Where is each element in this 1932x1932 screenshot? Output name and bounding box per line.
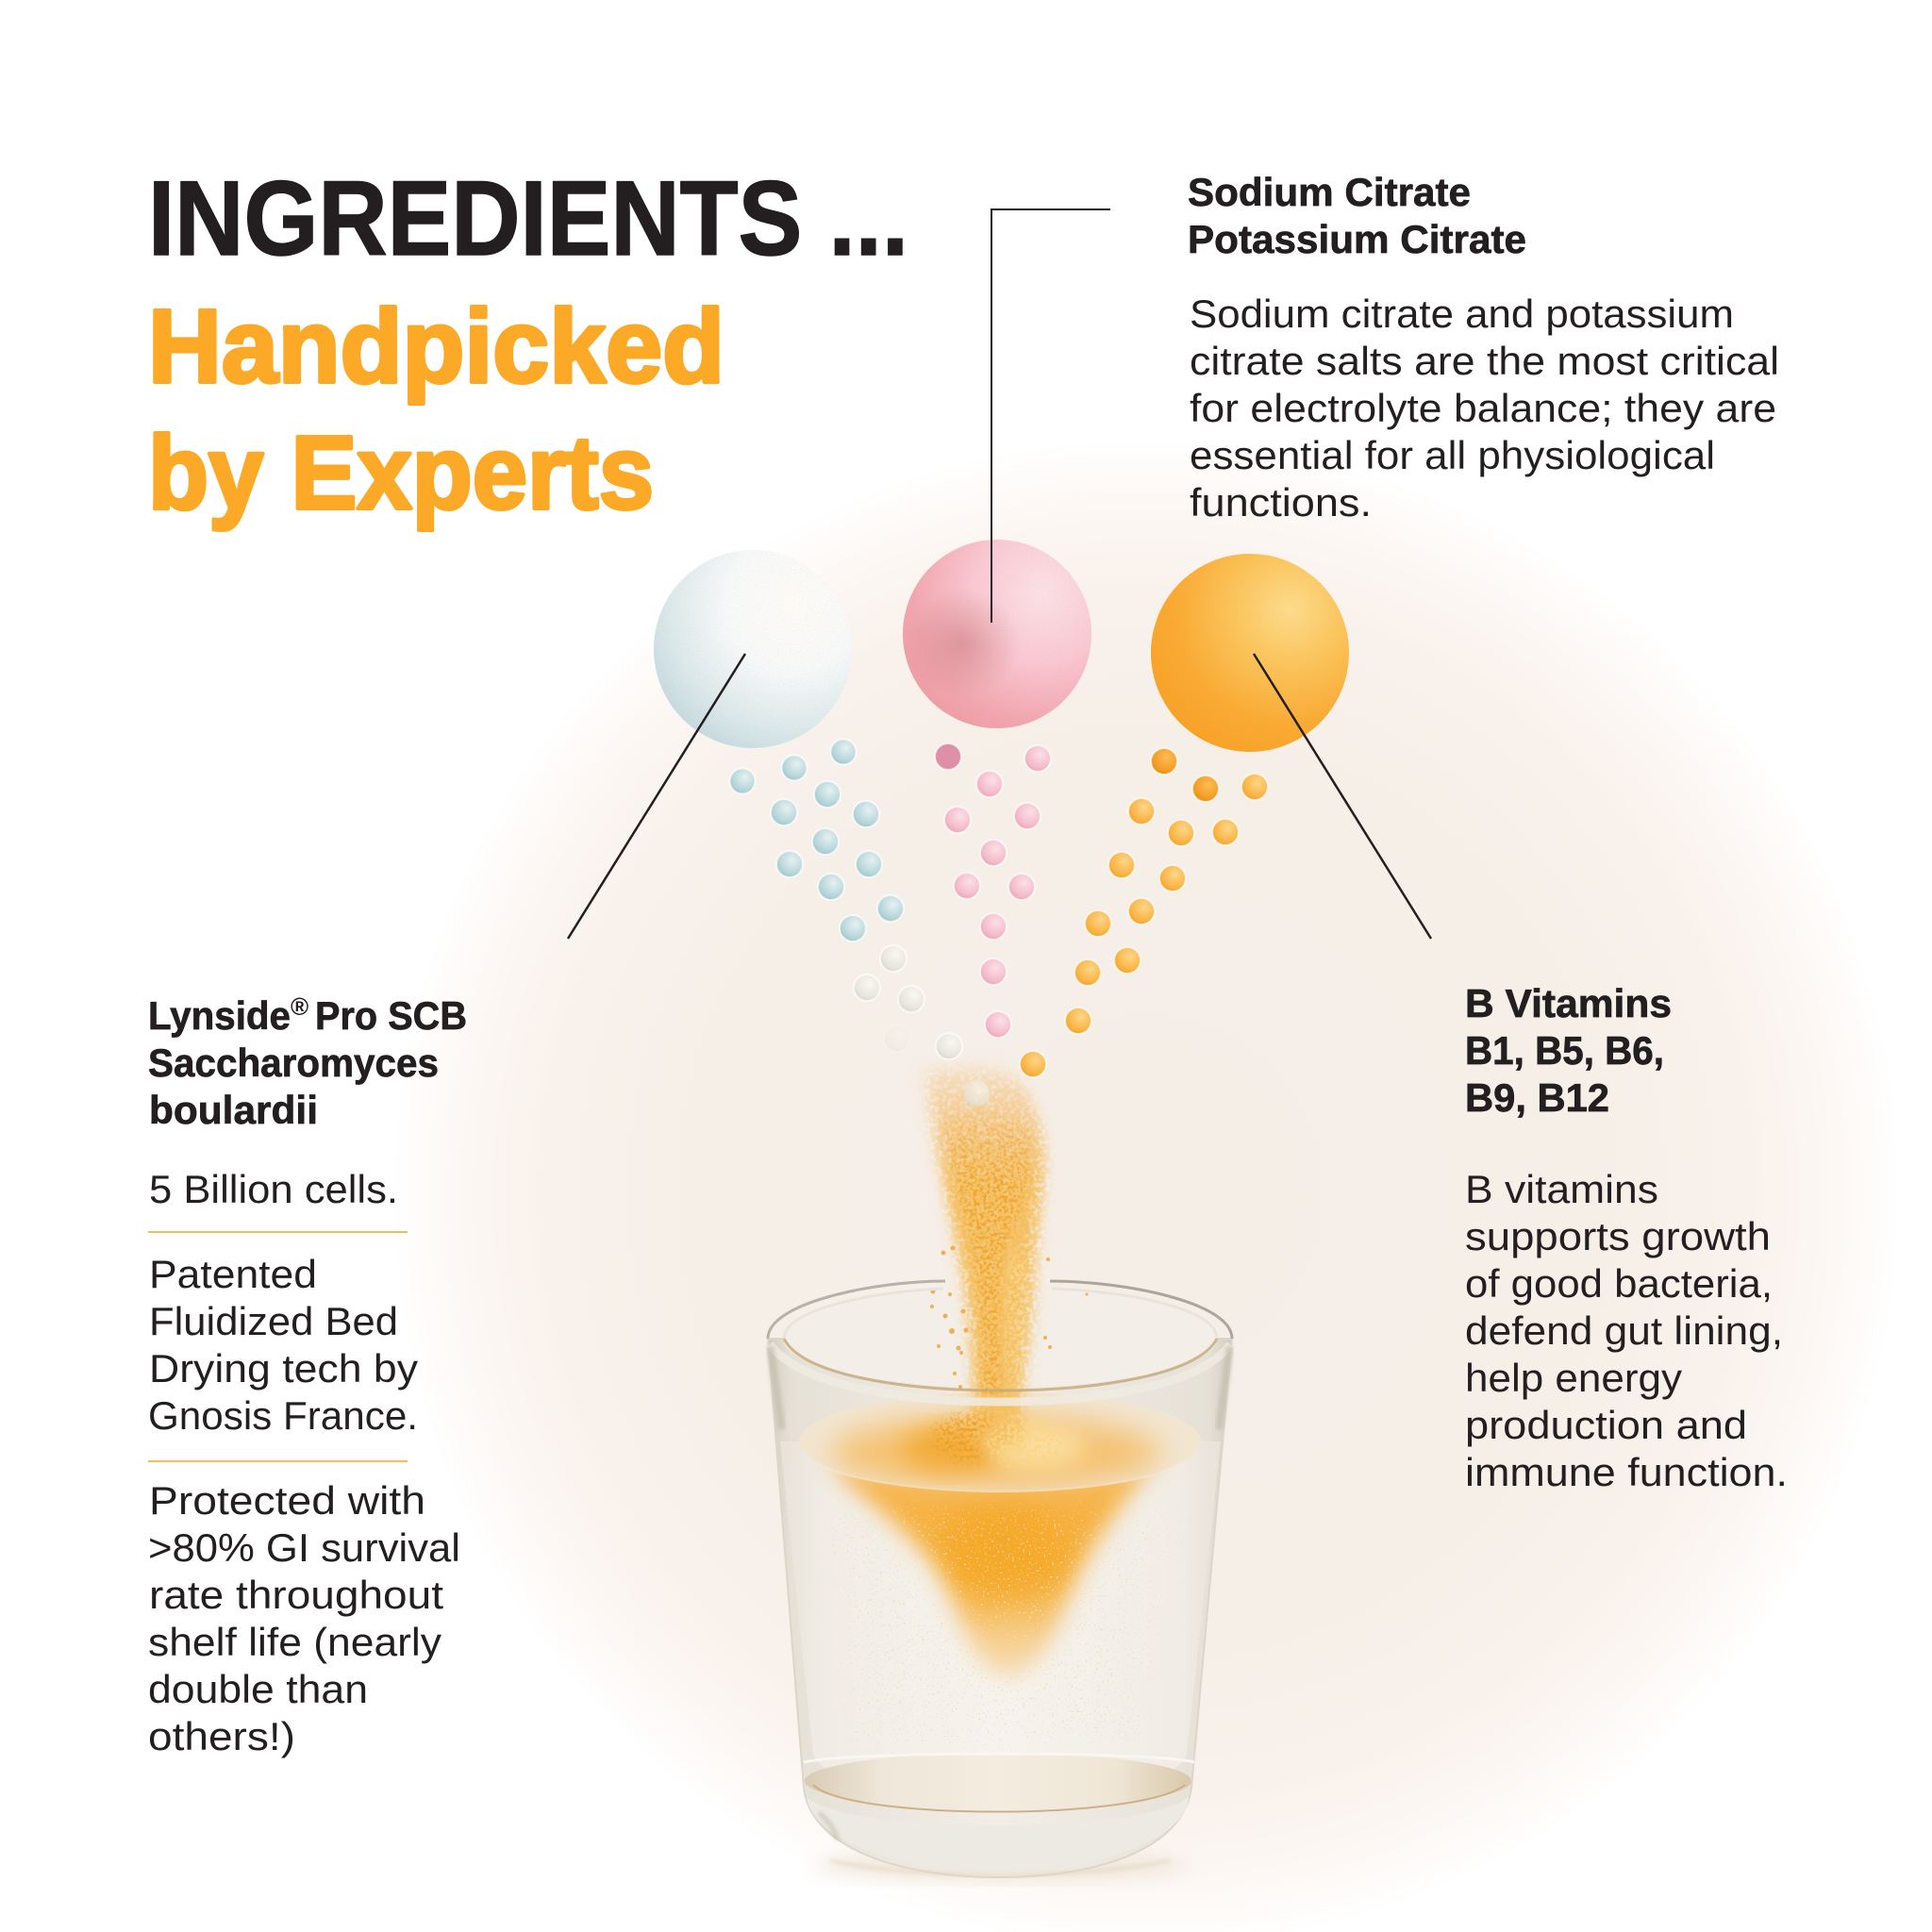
- small beads: [730, 740, 1268, 1107]
- powder at surface: [932, 1414, 1065, 1468]
- text block: citrates description: for electrolyte balance; they are: [1190, 386, 1776, 430]
- heading: lynside: Pro SCB: [315, 993, 467, 1038]
- beads: teal: [730, 740, 904, 941]
- text block: citrates description: essential for all physiological: [1190, 433, 1715, 477]
- powder cone in water: [821, 1467, 1179, 1745]
- text block: patented technology: Gnosis France.: [148, 1393, 418, 1438]
- text block: b vitamins description: production and: [1465, 1403, 1747, 1447]
- heading: b vitamins: [1465, 981, 1672, 1120]
- glass rim: [768, 1281, 1232, 1429]
- icon: orange sphere: [1151, 554, 1349, 752]
- text block: survival rate: >80% GI survival: [148, 1525, 460, 1570]
- text block: patented technology: Patented: [149, 1252, 317, 1296]
- text block: survival rate: others!): [148, 1714, 295, 1758]
- text block: b vitamins description: supports growth: [1465, 1214, 1771, 1258]
- icon: glass of water with dissolving powder: [768, 1290, 1232, 1879]
- text block: survival rate: shelf life (nearly: [148, 1620, 441, 1664]
- glass shadow: [811, 1853, 1189, 1879]
- beads: orange: [1020, 748, 1268, 1077]
- text block: patented technology: Fluidized Bed: [149, 1299, 398, 1343]
- stream highlight: [1004, 1245, 1025, 1396]
- heading: citrates: [1188, 170, 1526, 261]
- text block: b vitamins description: immune function.: [1465, 1450, 1788, 1494]
- text block: b vitamins description: defend gut lining,: [1465, 1308, 1783, 1353]
- icon: pink sphere: [903, 540, 1091, 728]
- heading: ingredients: INGREDIENTS ...: [148, 159, 908, 277]
- text block: citrates description: citrate salts are the most critical: [1190, 339, 1779, 383]
- panel: lynside text: [148, 992, 467, 1758]
- beads: cream: [854, 945, 990, 1107]
- heading: b vitamins: B9, B12: [1465, 1075, 1609, 1120]
- text block: citrates description: functions.: [1190, 480, 1372, 525]
- icon: white sphere: [654, 550, 852, 748]
- stream underlay: [929, 1067, 1040, 1443]
- beads: pink: [935, 743, 1051, 1038]
- water: [780, 1441, 1221, 1801]
- powder stream: [920, 1064, 1089, 1468]
- text block: survival rate: Protected with: [149, 1478, 425, 1523]
- heading: lynside: Saccharomyces: [148, 1041, 439, 1085]
- text block: patented technology: [148, 1252, 418, 1438]
- heading: lynside: boulardii: [149, 1088, 318, 1132]
- glass body: [768, 1339, 1232, 1877]
- heading: lynside: Lynside: [148, 993, 291, 1038]
- panel: b vitamins text: [1465, 981, 1788, 1494]
- heading: by experts: by Experts: [148, 415, 654, 531]
- text block: citrates description: Sodium citrate and potassium: [1190, 291, 1734, 336]
- arrow: pointer to orange sphere: [1254, 654, 1431, 939]
- heading: b vitamins: B1, B5, B6,: [1465, 1028, 1664, 1073]
- rim interior: [783, 1290, 1217, 1388]
- title: [148, 159, 908, 531]
- text block: cell count: 5 Billion cells.: [149, 1167, 398, 1211]
- water surface: [799, 1392, 1201, 1491]
- heading: lynside: ®: [291, 992, 308, 1021]
- text block: citrates description: [1190, 291, 1779, 525]
- heading: lynside: [148, 992, 467, 1132]
- arrow: pointer to pink sphere: [991, 209, 1110, 623]
- text block: b vitamins description: B vitamins: [1465, 1167, 1658, 1211]
- heading: citrates: Sodium Citrate: [1188, 170, 1471, 214]
- heading: b vitamins: B Vitamins: [1465, 981, 1672, 1025]
- text block: patented technology: Drying tech by: [149, 1346, 418, 1391]
- stream core: [945, 1111, 1030, 1396]
- stream light grains: [920, 1064, 1045, 1443]
- text block: survival rate: [148, 1478, 460, 1758]
- heading: handpicked: Handpicked: [148, 289, 724, 405]
- text block: survival rate: double than: [148, 1667, 368, 1711]
- text block: survival rate: rate throughout: [149, 1573, 443, 1617]
- stray powder specks: [930, 1245, 1089, 1389]
- text block: b vitamins description: of good bacteria,: [1465, 1261, 1773, 1306]
- arrow: pointer to white sphere: [568, 654, 745, 939]
- panel: sodium and potassium citrate text: [1188, 170, 1779, 525]
- heading: citrates: Potassium Citrate: [1188, 217, 1526, 261]
- text block: b vitamins description: help energy: [1465, 1356, 1682, 1400]
- text block: b vitamins description: [1465, 1167, 1788, 1494]
- pale speckles: [821, 1509, 1179, 1745]
- glass base: [804, 1753, 1194, 1874]
